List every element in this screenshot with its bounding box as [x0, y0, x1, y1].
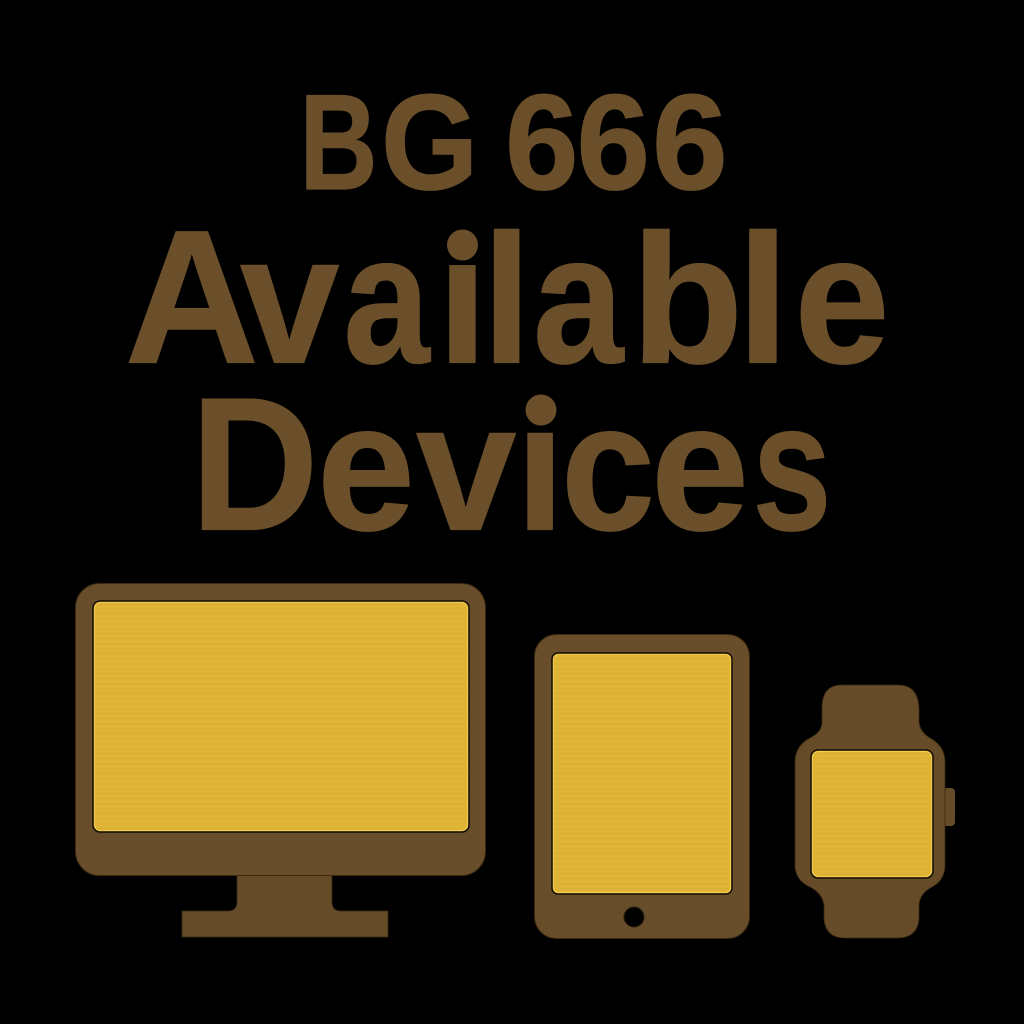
heading: Available: i: [437, 196, 488, 402]
heading: Available: b: [631, 196, 743, 402]
title: BG 666: 6: [576, 66, 650, 218]
title: BG 666: 6: [652, 66, 728, 218]
heading: Devices: e: [317, 364, 415, 568]
heading: Available: a: [533, 196, 625, 402]
heading: Available: a: [343, 196, 431, 402]
title: BG 666: B: [300, 66, 378, 218]
heading: Devices: [180, 358, 832, 570]
heading: Available: [125, 192, 889, 404]
title: BG 666: 6: [505, 66, 578, 218]
heading: Devices: D: [190, 358, 318, 570]
icon: desktop monitor: [76, 584, 486, 937]
icon: smartwatch: [795, 685, 955, 938]
heading: Available: v: [240, 196, 339, 402]
heading: Available: e: [794, 196, 890, 402]
icon: tablet: [534, 634, 750, 938]
heading: Available: A: [125, 192, 259, 404]
heading: Devices: s: [752, 364, 832, 568]
heading: Devices: e: [651, 364, 749, 568]
title: BG 666: G: [381, 66, 478, 218]
heading: Devices: v: [416, 364, 516, 568]
heading: Devices: i: [516, 364, 565, 568]
heading: Available: l: [482, 196, 531, 402]
heading: Devices: c: [561, 364, 655, 568]
heading: Available: l: [736, 196, 790, 402]
